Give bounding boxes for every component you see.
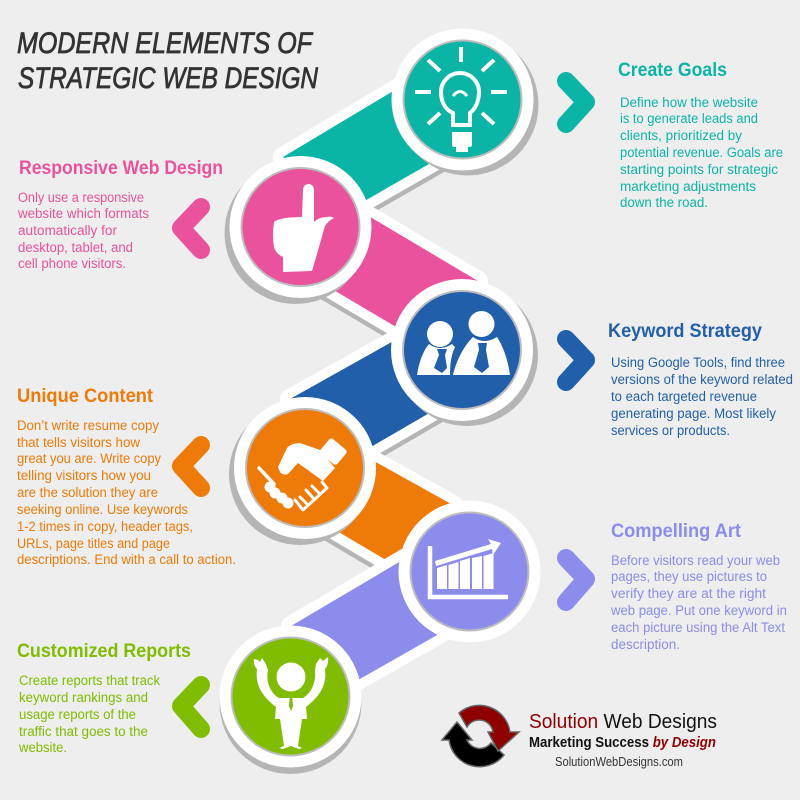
text block: compelling art: description. bbox=[611, 637, 680, 652]
ribbon: purple bbox=[291, 532, 460, 696]
text block: unique content bbox=[17, 386, 236, 567]
text block: compelling art bbox=[610, 521, 787, 652]
title bbox=[17, 27, 318, 95]
circle: keyword strategy bbox=[391, 279, 538, 426]
text block: compelling art: verify they are at the right bbox=[611, 586, 766, 601]
text block: create goals: clients, prioritized by bbox=[620, 128, 742, 143]
text block: customized reports: keyword rankings and bbox=[19, 690, 148, 705]
text block: create goals: Create Goals bbox=[618, 60, 727, 81]
arrow: blue chevron bbox=[566, 339, 586, 382]
text block: keyword strategy: generating page. Most likely bbox=[611, 406, 776, 421]
arrow: teal chevron bbox=[566, 81, 586, 124]
text block: unique content: URLs, page titles and page bbox=[17, 536, 170, 551]
text block: compelling art: Compelling Art bbox=[611, 521, 742, 542]
text block: create goals: starting points for strategic bbox=[620, 162, 778, 177]
text block: keyword strategy: versions of the keyword related bbox=[611, 372, 793, 387]
icon: handshake bbox=[259, 437, 348, 510]
arrow: pink chevron bbox=[181, 207, 201, 250]
circle: customized reports bbox=[220, 626, 362, 774]
logo url: SolutionWebDesigns.com bbox=[555, 754, 683, 769]
icon: person with raised arms bbox=[254, 657, 328, 749]
title: STRATEGIC WEB DESIGN bbox=[18, 62, 318, 95]
ribbon: teal bbox=[283, 63, 452, 219]
circle: create goals bbox=[392, 28, 538, 176]
text block: keyword strategy: Using Google Tools, find three bbox=[611, 355, 785, 370]
text block: create goals: down the road. bbox=[620, 195, 708, 210]
text block: unique content: telling visitors how you bbox=[17, 468, 151, 483]
text block: unique content: 1-2 times in copy, header tags, bbox=[17, 519, 193, 534]
text block: keyword strategy bbox=[608, 321, 793, 438]
text block: customized reports: Customized Reports bbox=[17, 641, 191, 662]
text block: keyword strategy: to each targeted revenue bbox=[611, 389, 757, 404]
icon: two business people bbox=[417, 311, 510, 375]
text block: unique content: seeking online. Use keywords bbox=[17, 502, 188, 517]
icon: rising bar chart bbox=[430, 539, 508, 597]
logo wordmark: Solution Web Designs bbox=[529, 711, 717, 733]
text block: unique content: Don’t write resume copy bbox=[17, 418, 159, 433]
ribbon: pink bbox=[308, 199, 478, 351]
circle: unique content bbox=[229, 397, 376, 545]
text block: responsive web design: automatically for bbox=[18, 223, 118, 238]
text block: responsive web design: Responsive Web Design bbox=[19, 158, 223, 179]
icon: pointing hand bbox=[273, 184, 334, 272]
text block: responsive web design: Only use a responsive bbox=[18, 190, 144, 205]
text block: unique content: are the solution they are bbox=[17, 485, 158, 500]
arrow: green chevron bbox=[181, 685, 201, 729]
text block: customized reports: website. bbox=[18, 740, 67, 755]
icon: light bulb bbox=[415, 47, 507, 152]
text block: customized reports: Create reports that track bbox=[19, 673, 160, 688]
text block: responsive web design: desktop, tablet, and bbox=[18, 240, 133, 255]
text block: keyword strategy: services or products. bbox=[611, 423, 730, 438]
text block: unique content: that tells visitors how bbox=[17, 435, 140, 450]
text block: create goals: is to generate leads and bbox=[620, 111, 758, 126]
text block: responsive web design: website which formats bbox=[17, 206, 149, 221]
title: MODERN ELEMENTS OF bbox=[17, 27, 313, 60]
circle: responsive web design bbox=[224, 156, 372, 304]
text block: compelling art: pages, they use pictures to bbox=[611, 569, 767, 584]
text block: customized reports bbox=[17, 641, 191, 755]
logo: solution web designs bbox=[442, 705, 717, 769]
text block: create goals: marketing adjustments bbox=[620, 179, 756, 194]
logo tagline: Marketing Success by Design bbox=[529, 734, 716, 751]
text block: responsive web design: cell phone visitors. bbox=[18, 256, 126, 271]
arrow: purple chevron bbox=[566, 558, 586, 602]
text block: create goals bbox=[618, 60, 783, 210]
text block: keyword strategy: Keyword Strategy bbox=[608, 321, 762, 342]
text block: customized reports: usage reports of the bbox=[19, 707, 136, 722]
text block: unique content: great you are. Write copy bbox=[17, 451, 161, 466]
circle: compelling art bbox=[398, 500, 540, 642]
text block: create goals: Define how the website bbox=[620, 95, 758, 110]
ribbon: blue bbox=[290, 315, 452, 466]
text block: responsive web design bbox=[17, 158, 223, 271]
text block: create goals: potential revenue. Goals are bbox=[620, 145, 783, 160]
text block: compelling art: Before visitors read your web bbox=[611, 553, 780, 568]
ribbon: orange bbox=[313, 445, 453, 596]
text block: unique content: Unique Content bbox=[17, 386, 154, 407]
icon: circular arrows bbox=[442, 705, 519, 767]
arrow: orange chevron bbox=[181, 445, 201, 488]
text block: customized reports: traffic that goes to the bbox=[19, 724, 148, 739]
text block: unique content: descriptions. End with a call to action. bbox=[17, 552, 236, 567]
text block: compelling art: each picture using the Alt Text bbox=[611, 620, 785, 635]
text block: compelling art: web page. Put one keyword in bbox=[610, 603, 787, 618]
